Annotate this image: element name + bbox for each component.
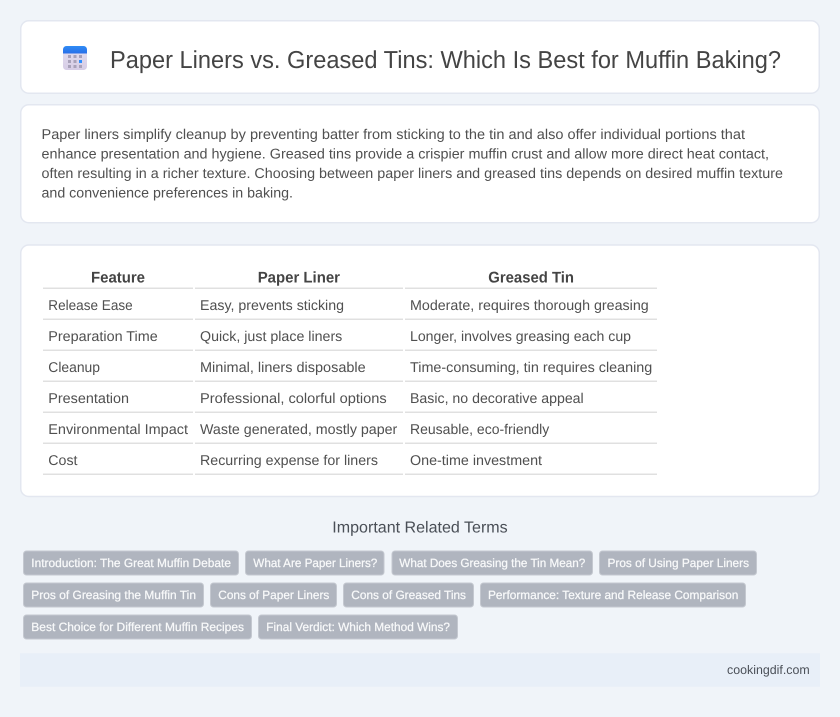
tag bbox=[24, 615, 252, 639]
tag: Best Choice for Different Muffin Recipes bbox=[31, 620, 244, 634]
tag bbox=[210, 583, 336, 607]
heading: related terms: Important Related Terms bbox=[332, 520, 508, 537]
panel: summary paragraph bbox=[21, 105, 819, 223]
text block: summary bbox=[42, 127, 783, 202]
table row: preparation time: Longer, involves greasing each cup bbox=[410, 329, 631, 345]
footer source: cookingdif.com bbox=[727, 663, 810, 677]
table row: cost: Recurring expense for liners bbox=[200, 453, 378, 469]
tag: Introduction: The Great Muffin Debate bbox=[31, 556, 231, 570]
table row: presentation: Presentation bbox=[48, 391, 129, 407]
panel: header bbox=[21, 21, 819, 93]
table row: environmental impact: Environmental Impact bbox=[48, 422, 188, 438]
panel: comparison table bbox=[21, 245, 819, 496]
table header row: Feature bbox=[91, 270, 145, 286]
table row: presentation bbox=[43, 391, 657, 413]
tag bbox=[258, 615, 458, 639]
table row: release ease bbox=[43, 298, 657, 320]
tag bbox=[344, 583, 474, 607]
table row: cleanup: Time-consuming, tin requires cleaning bbox=[410, 360, 652, 376]
text block: summary: enhance presentation and hygiene. Greased tins provide a crispier muffin crust and allow more direct heat contact, bbox=[42, 146, 769, 162]
tag bbox=[24, 583, 204, 607]
table row: environmental impact: Reusable, eco-friendly bbox=[410, 422, 550, 438]
table row: release ease: Easy, prevents sticking bbox=[200, 298, 344, 314]
table header row: Paper Liner bbox=[258, 270, 340, 286]
tag: Final Verdict: Which Method Wins? bbox=[266, 620, 450, 634]
table row: release ease: Release Ease bbox=[48, 298, 133, 314]
tag bbox=[246, 551, 384, 575]
table row: cost: Cost bbox=[48, 453, 78, 469]
tag: Performance: Texture and Release Comparison bbox=[488, 588, 738, 602]
table row: preparation time: Preparation Time bbox=[48, 329, 158, 345]
text block: summary: and convenience preferences in baking. bbox=[42, 186, 293, 202]
table row: cleanup bbox=[43, 360, 657, 382]
tag: Cons of Paper Liners bbox=[218, 588, 329, 602]
footer bar bbox=[20, 653, 820, 687]
tag bbox=[600, 551, 756, 575]
tag bbox=[392, 551, 592, 575]
table row: cost bbox=[43, 453, 657, 475]
tag: Pros of Using Paper Liners bbox=[608, 556, 749, 570]
tag: What Does Greasing the Tin Mean? bbox=[399, 556, 586, 570]
table row: presentation: Professional, colorful options bbox=[200, 391, 387, 407]
table row: preparation time bbox=[43, 329, 657, 351]
tag: What Are Paper Liners? bbox=[253, 556, 378, 570]
tag bbox=[480, 583, 746, 607]
table row: environmental impact bbox=[43, 422, 657, 444]
table row: cleanup: Cleanup bbox=[48, 360, 100, 376]
table row: presentation: Basic, no decorative appeal bbox=[410, 391, 584, 407]
text block: summary: often resulting in a richer texture. Choosing between paper liners and greased tins depends on desired muffin texture bbox=[42, 166, 783, 182]
table row: environmental impact: Waste generated, mostly paper bbox=[200, 422, 398, 438]
tag: Cons of Greased Tins bbox=[351, 588, 466, 602]
icon: calendar bbox=[63, 46, 87, 70]
tag bbox=[24, 551, 238, 575]
tag: Pros of Greasing the Muffin Tin bbox=[31, 588, 196, 602]
text block: summary: Paper liners simplify cleanup by preventing batter from sticking to the tin and also offer individual portions that bbox=[42, 127, 745, 143]
table row: preparation time: Quick, just place liners bbox=[200, 329, 342, 345]
table header row: Greased Tin bbox=[488, 270, 574, 286]
table row: release ease: Moderate, requires thorough greasing bbox=[410, 298, 649, 314]
table row: cleanup: Minimal, liners disposable bbox=[200, 360, 366, 376]
title: Paper Liners vs. Greased Tins: Which Is Best for Muffin Baking? bbox=[110, 47, 781, 74]
related terms tags bbox=[24, 551, 756, 639]
table header row bbox=[43, 270, 657, 289]
table row: cost: One-time investment bbox=[410, 453, 542, 469]
